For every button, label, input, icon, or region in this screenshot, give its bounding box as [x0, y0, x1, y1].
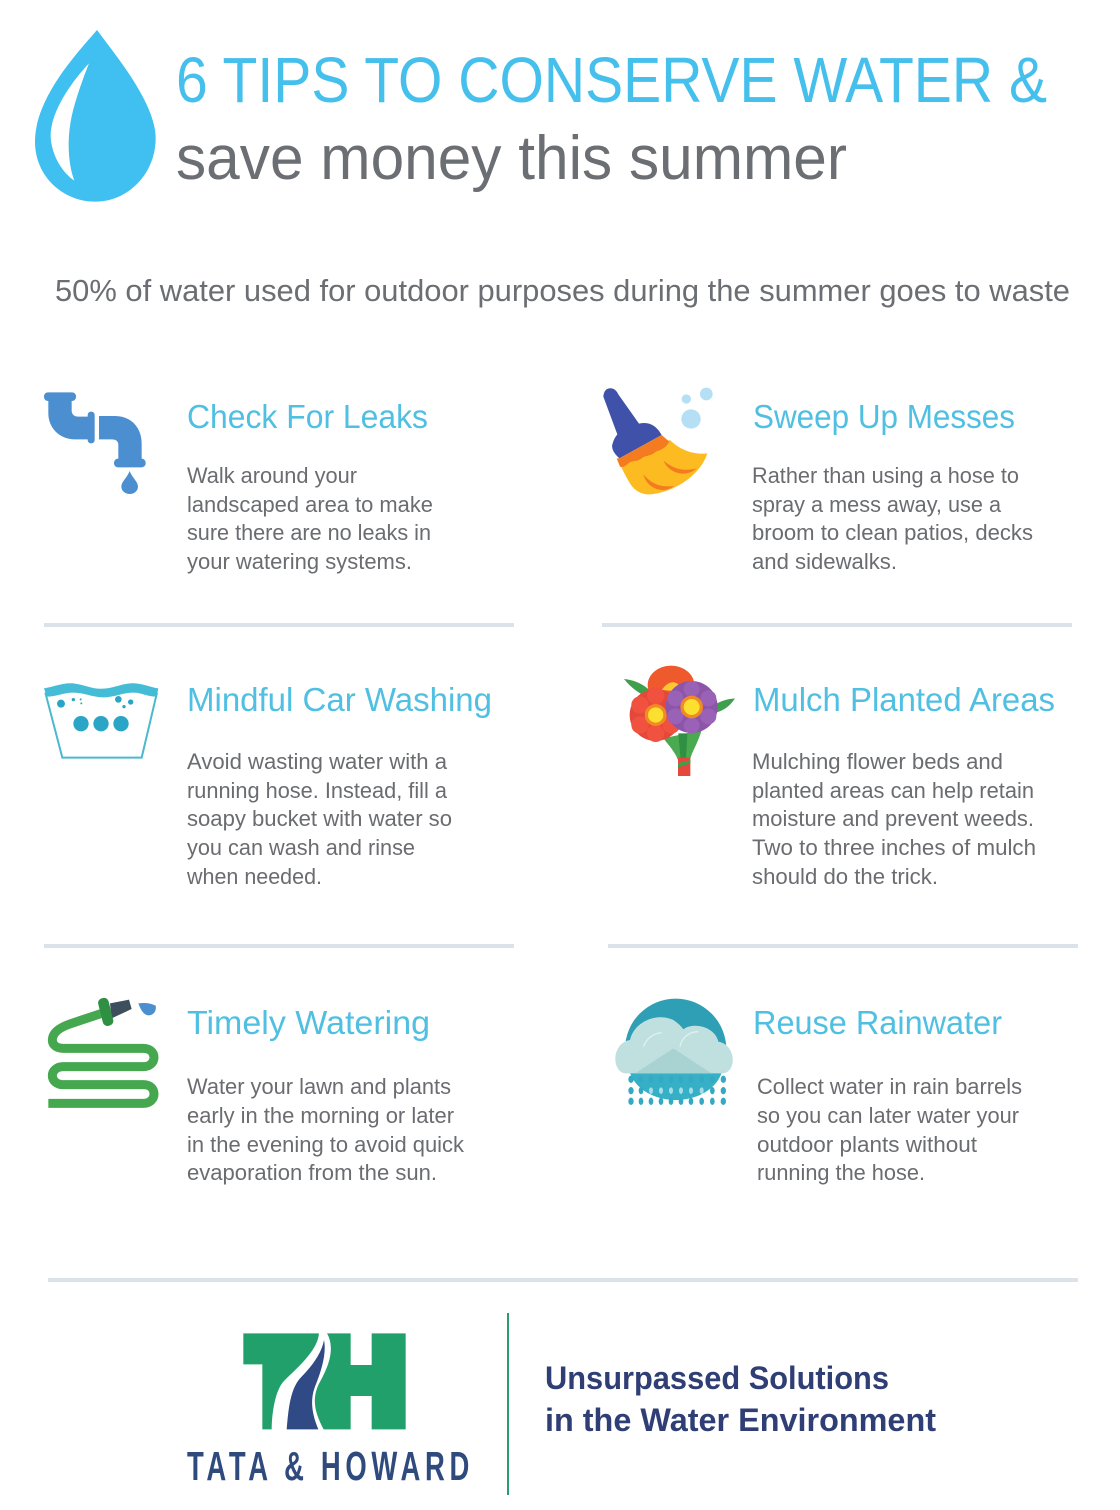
panel: sweep up messes	[603, 388, 1033, 574]
body text: in the evening to avoid quick	[187, 1132, 465, 1157]
footer logo	[187, 1333, 474, 1489]
logo wordmark: TATA & HOWARD	[187, 1443, 474, 1489]
panel: check for leaks	[44, 392, 433, 574]
body text: Rather than using a hose to	[752, 463, 1019, 488]
body text	[187, 1074, 465, 1185]
title	[176, 44, 1047, 193]
icon: soapy bucket	[44, 683, 158, 758]
body text: outdoor plants without	[757, 1132, 977, 1157]
body text: sure there are no leaks in	[187, 520, 431, 545]
icon: leaking pipe	[44, 392, 146, 494]
body text: your watering systems.	[187, 549, 412, 574]
body text: running hose. Instead, fill a	[187, 778, 448, 803]
panel: mulch planted areas	[624, 666, 1055, 889]
icon: garden hose	[48, 997, 156, 1103]
body text: planted areas can help retain	[752, 778, 1034, 803]
tagline	[545, 1360, 936, 1438]
heading: Mulch Planted Areas	[753, 681, 1055, 718]
body text: soapy bucket with water so	[187, 806, 452, 831]
body text: Walk around your	[187, 463, 357, 488]
body text: landscaped area to make	[187, 492, 433, 517]
body text: Mulching flower beds and	[752, 749, 1003, 774]
panel: reuse rainwater	[615, 999, 1022, 1185]
logo mark	[243, 1333, 406, 1430]
body text: moisture and prevent weeds.	[752, 806, 1034, 831]
body text: spray a mess away, use a	[752, 492, 1002, 517]
icon: water drop	[35, 30, 156, 202]
body text: evaporation from the sun.	[187, 1160, 437, 1185]
body text	[757, 1074, 1022, 1185]
tagline: Unsurpassed Solutions	[545, 1360, 889, 1396]
heading: Timely Watering	[187, 1004, 430, 1041]
body text: you can wash and rinse	[187, 835, 415, 860]
icon: flower bouquet	[624, 666, 735, 776]
body text	[752, 749, 1036, 889]
body text: should do the trick.	[752, 864, 938, 889]
subtitle: 50% of water used for outdoor purposes during the summer goes to waste	[55, 273, 1070, 308]
body text: so you can later water your	[757, 1103, 1019, 1128]
body text: running the hose.	[757, 1160, 925, 1185]
icon: broom	[603, 388, 713, 494]
body text: and sidewalks.	[752, 549, 897, 574]
body text: Collect water in rain barrels	[757, 1074, 1022, 1099]
body text: Water your lawn and plants	[187, 1074, 451, 1099]
body text: when needed.	[186, 864, 322, 889]
heading: Reuse Rainwater	[753, 1004, 1002, 1041]
icon: rain cloud	[615, 999, 733, 1105]
body text	[752, 463, 1033, 574]
heading: Mindful Car Washing	[187, 681, 492, 718]
body text: Two to three inches of mulch	[752, 835, 1036, 860]
heading: Sweep Up Messes	[753, 398, 1015, 435]
body text	[186, 749, 452, 889]
tagline: in the Water Environment	[545, 1402, 936, 1438]
panel: mindful car washing	[44, 681, 492, 889]
title: save money this summer	[176, 124, 847, 193]
body text: broom to clean patios, decks	[752, 520, 1033, 545]
panel: timely watering	[48, 997, 465, 1185]
body text	[187, 463, 433, 574]
body text: Avoid wasting water with a	[187, 749, 448, 774]
body text: early in the morning or later	[187, 1103, 454, 1128]
heading: Check For Leaks	[187, 398, 428, 435]
